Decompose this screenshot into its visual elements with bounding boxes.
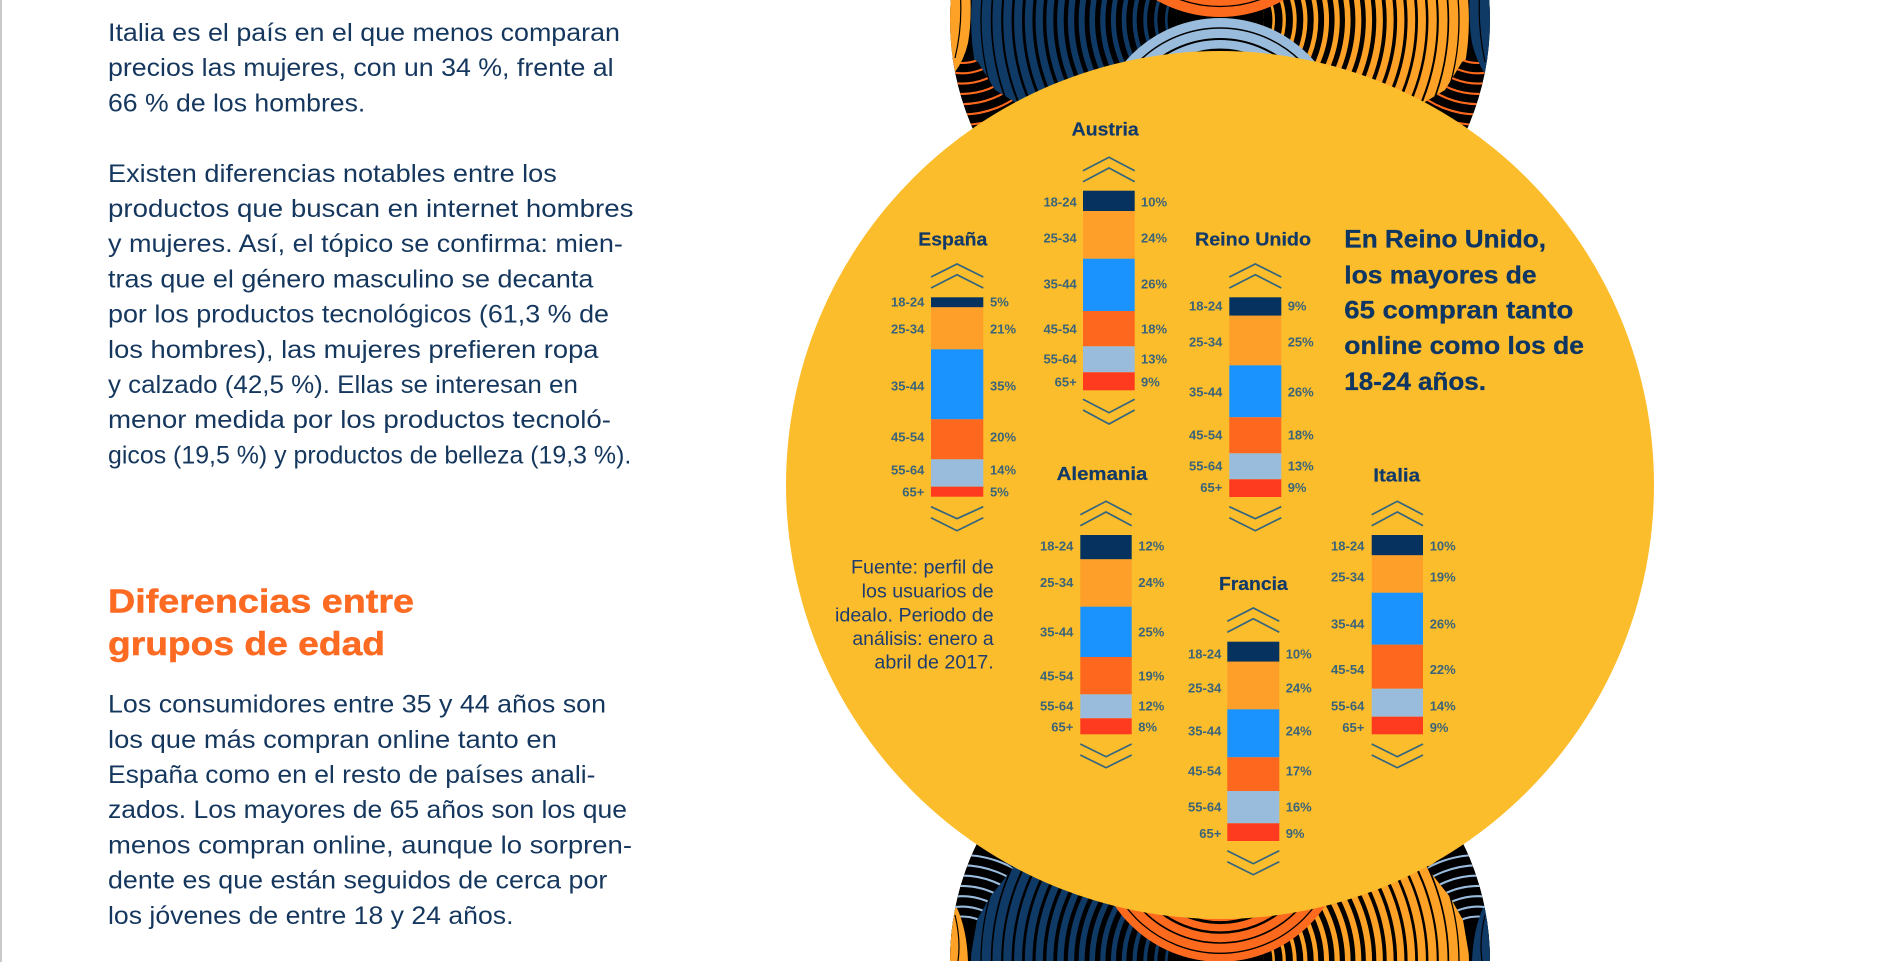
age labels: Austria: 35-44 [1043,276,1077,291]
percentages: Alemania: 19% [1138,668,1165,683]
text block: consumidores por edad [108,691,632,930]
text block: diferencias entre productos [108,160,633,469]
percentages: Italia [1430,539,1456,735]
arrows up: Reino Unido [1229,264,1281,288]
age labels: Reino Unido: 25-34 [1189,335,1223,350]
title: Francia: Francia [1219,573,1288,594]
chart: Italia [1331,465,1456,768]
text block: comparación de precios Italia: precios las mujeres, con un 34 %, frente al [108,54,614,82]
percentages: Alemania: 12% [1138,699,1165,714]
percentages: Alemania: 8% [1138,720,1158,735]
arrows down: Reino Unido [1229,507,1281,531]
age labels: Austria: 55-64 [1043,352,1077,367]
chart: Francia [1188,573,1312,875]
percentages: Alemania: 24% [1138,575,1165,590]
text block: diferencias entre productos: por los productos tecnológicos (61,3 % de [108,301,609,329]
age labels: Reino Unido: 35-44 [1189,385,1223,400]
percentages: Austria [1141,194,1167,389]
age labels: Italia: 35-44 [1331,617,1365,632]
percentages: Reino Unido: 18% [1288,428,1314,443]
title: Italia: Italia [1373,465,1421,486]
percentages: Austria: 13% [1141,352,1167,367]
callout: Reino Unido: 65 compran tanto [1344,297,1573,325]
percentages: Francia: 16% [1286,799,1312,814]
percentages: España: 35% [990,378,1016,393]
percentages: España: 20% [990,429,1016,444]
age labels: Reino Unido: 18-24 [1189,299,1223,314]
arrows down: Francia [1227,851,1279,875]
percentages: Italia: 14% [1430,698,1456,713]
text block: diferencias entre productos: gicos (19,5 %) y productos de belleza (19,3 %). [108,441,631,469]
age labels: Reino Unido: 55-64 [1189,458,1223,473]
age labels: Francia: 55-64 [1188,799,1222,814]
source note [835,556,994,673]
arrows down: Alemania [1080,744,1132,768]
arrows up: Alemania [1080,501,1132,526]
arrows down: Austria [1083,399,1135,424]
age labels: Reino Unido: 65+ [1200,480,1223,495]
source note: abril de 2017. [874,651,994,673]
percentages: Reino Unido [1288,299,1314,495]
text block: consumidores por edad: los que más compran online tanto en [108,726,557,754]
percentages: España: 5% [990,295,1009,310]
age labels: España: 35-44 [891,378,925,393]
age labels: Alemania: 35-44 [1040,625,1074,640]
percentages: Reino Unido: 25% [1288,335,1314,350]
percentages: España: 21% [990,322,1016,337]
percentages: Austria: 10% [1141,194,1167,209]
age labels: Alemania: 55-64 [1040,699,1074,714]
title: Austria: Austria [1072,119,1139,140]
age labels: Francia: 45-54 [1188,764,1222,779]
age labels: Alemania: 45-54 [1040,668,1074,683]
text block: diferencias entre productos: Existen diferencias notables entre los [108,160,557,188]
percentages: Italia: 10% [1430,539,1456,554]
age labels: Francia: 35-44 [1188,723,1222,738]
age labels: España: 25-34 [891,322,925,337]
age labels: Alemania: 25-34 [1040,575,1074,590]
chart: Austria [1043,119,1167,424]
text block: diferencias entre productos: productos que buscan en internet hombres [108,195,633,223]
stacked bar: Francia [1227,642,1279,841]
text block: consumidores por edad: dente es que están seguidos de cerca por [108,867,607,895]
title: Alemania: Alemania [1057,463,1148,484]
callout: Reino Unido: los mayores de [1344,261,1537,289]
text block: consumidores por edad: zados. Los mayores de 65 años son los que [108,796,627,824]
age labels: Francia: 65+ [1199,826,1222,841]
age labels: España [891,295,925,499]
arrows up: España [931,264,983,288]
stacked bar: Reino Unido [1229,297,1281,497]
age labels: España: 65+ [902,484,925,499]
text block: comparación de precios Italia: 66 % de los hombres. [108,89,365,117]
text block: diferencias entre productos: y mujeres. Así, el tópico se confirma: mien- [108,230,623,258]
arrows up: Italia [1372,501,1423,526]
text block: comparación de precios Italia [108,19,620,117]
source note: análisis: enero a [852,628,994,650]
text block: consumidores por edad: Los consumidores entre 35 y 44 años son [108,691,606,719]
age labels: España: 18-24 [891,295,925,310]
stacked bar: Austria [1083,191,1135,390]
percentages: Reino Unido: 9% [1288,480,1307,495]
percentages: Austria: 26% [1141,276,1167,291]
stacked bar: Alemania [1080,535,1132,734]
age labels: Austria: 18-24 [1043,194,1077,209]
percentages: España: 5% [990,484,1009,499]
percentages: España [990,295,1016,499]
percentages: Austria: 9% [1141,374,1160,389]
decorative concentric circles: top [950,0,1490,128]
source note: Fuente: perfil de [851,556,994,578]
age labels: Alemania [1040,539,1074,735]
percentages: Italia: 9% [1430,720,1449,735]
age labels: Italia: 18-24 [1331,539,1365,554]
text block: consumidores por edad: España como en el resto de países anali- [108,761,596,789]
heading: diferencias entre grupos de edad: Diferencias entre [108,582,414,619]
decorative concentric circles: bottom [950,844,1490,961]
heading: diferencias entre grupos de edad: grupos de edad [108,625,385,662]
age labels: España: 55-64 [891,463,925,478]
source note: idealo. Periodo de [835,604,994,626]
percentages: Italia: 22% [1430,662,1456,677]
chart: Reino Unido [1189,229,1314,531]
percentages: Francia: 10% [1286,646,1312,661]
age labels: Francia: 18-24 [1188,646,1222,661]
age labels: Austria [1043,194,1077,389]
percentages: Alemania: 12% [1138,539,1165,554]
percentages: Austria: 24% [1141,231,1167,246]
text block: consumidores por edad: menos compran online, aunque lo sorpren- [108,831,632,859]
text block: comparación de precios Italia: Italia es el país en el que menos comparan [108,19,620,47]
percentages: Reino Unido: 9% [1288,299,1307,314]
source note: los usuarios de [862,580,994,602]
callout: Reino Unido: En Reino Unido, [1344,226,1546,254]
age labels: Alemania: 65+ [1051,720,1074,735]
age labels: Austria: 65+ [1055,374,1077,389]
percentages: Alemania: 25% [1138,625,1165,640]
chart: España [891,229,1016,531]
age labels: Reino Unido: 45-54 [1189,428,1223,443]
arrows up: Francia [1227,608,1279,632]
callout: Reino Unido: 18-24 años. [1344,368,1486,396]
text block: diferencias entre productos: y calzado (42,5 %). Ellas se interesan en [108,371,578,399]
arrows up: Austria [1083,157,1135,182]
callout: Reino Unido: online como los de [1344,332,1584,360]
text block: diferencias entre productos: los hombres), las mujeres prefieren ropa [108,336,599,364]
age labels: Francia: 25-34 [1188,681,1222,696]
arrows down: España [931,507,983,531]
percentages: Francia: 17% [1286,764,1312,779]
percentages: Francia: 24% [1286,723,1312,738]
percentages: Reino Unido: 13% [1288,458,1314,473]
percentages: Alemania [1138,539,1165,735]
percentages: Francia: 9% [1286,826,1305,841]
text block: diferencias entre productos: menor medida por los productos tecnoló- [108,406,611,434]
stacked bar: Italia [1372,535,1423,734]
age labels: Francia [1188,646,1222,841]
age labels: Italia: 65+ [1342,720,1365,735]
text block: diferencias entre productos: tras que el género masculino se decanta [108,265,594,293]
chart: Alemania [1040,463,1165,768]
percentages: Reino Unido: 26% [1288,385,1314,400]
percentages: Italia: 26% [1430,617,1456,632]
stacked bar: España [931,297,983,497]
heading: diferencias entre grupos de edad [108,582,414,662]
age labels: Reino Unido [1189,299,1223,495]
percentages: Francia [1286,646,1312,841]
age labels: Austria: 45-54 [1043,322,1077,337]
title: España: España [918,229,988,250]
age labels: Italia: 45-54 [1331,662,1365,677]
title: Reino Unido: Reino Unido [1195,229,1311,250]
percentages: Italia: 19% [1430,569,1456,584]
age labels: Italia: 25-34 [1331,569,1365,584]
age labels: Austria: 25-34 [1043,231,1077,246]
percentages: España: 14% [990,463,1016,478]
panel: yellow circle [786,51,1654,919]
age labels: España: 45-54 [891,429,925,444]
age labels: Italia [1331,539,1365,735]
percentages: Francia: 24% [1286,681,1312,696]
age labels: Italia: 55-64 [1331,698,1365,713]
percentages: Austria: 18% [1141,322,1167,337]
arrows down: Italia [1372,744,1423,768]
callout: Reino Unido [1344,226,1584,396]
text block: consumidores por edad: los jóvenes de entre 18 y 24 años. [108,902,514,930]
age labels: Alemania: 18-24 [1040,539,1074,554]
